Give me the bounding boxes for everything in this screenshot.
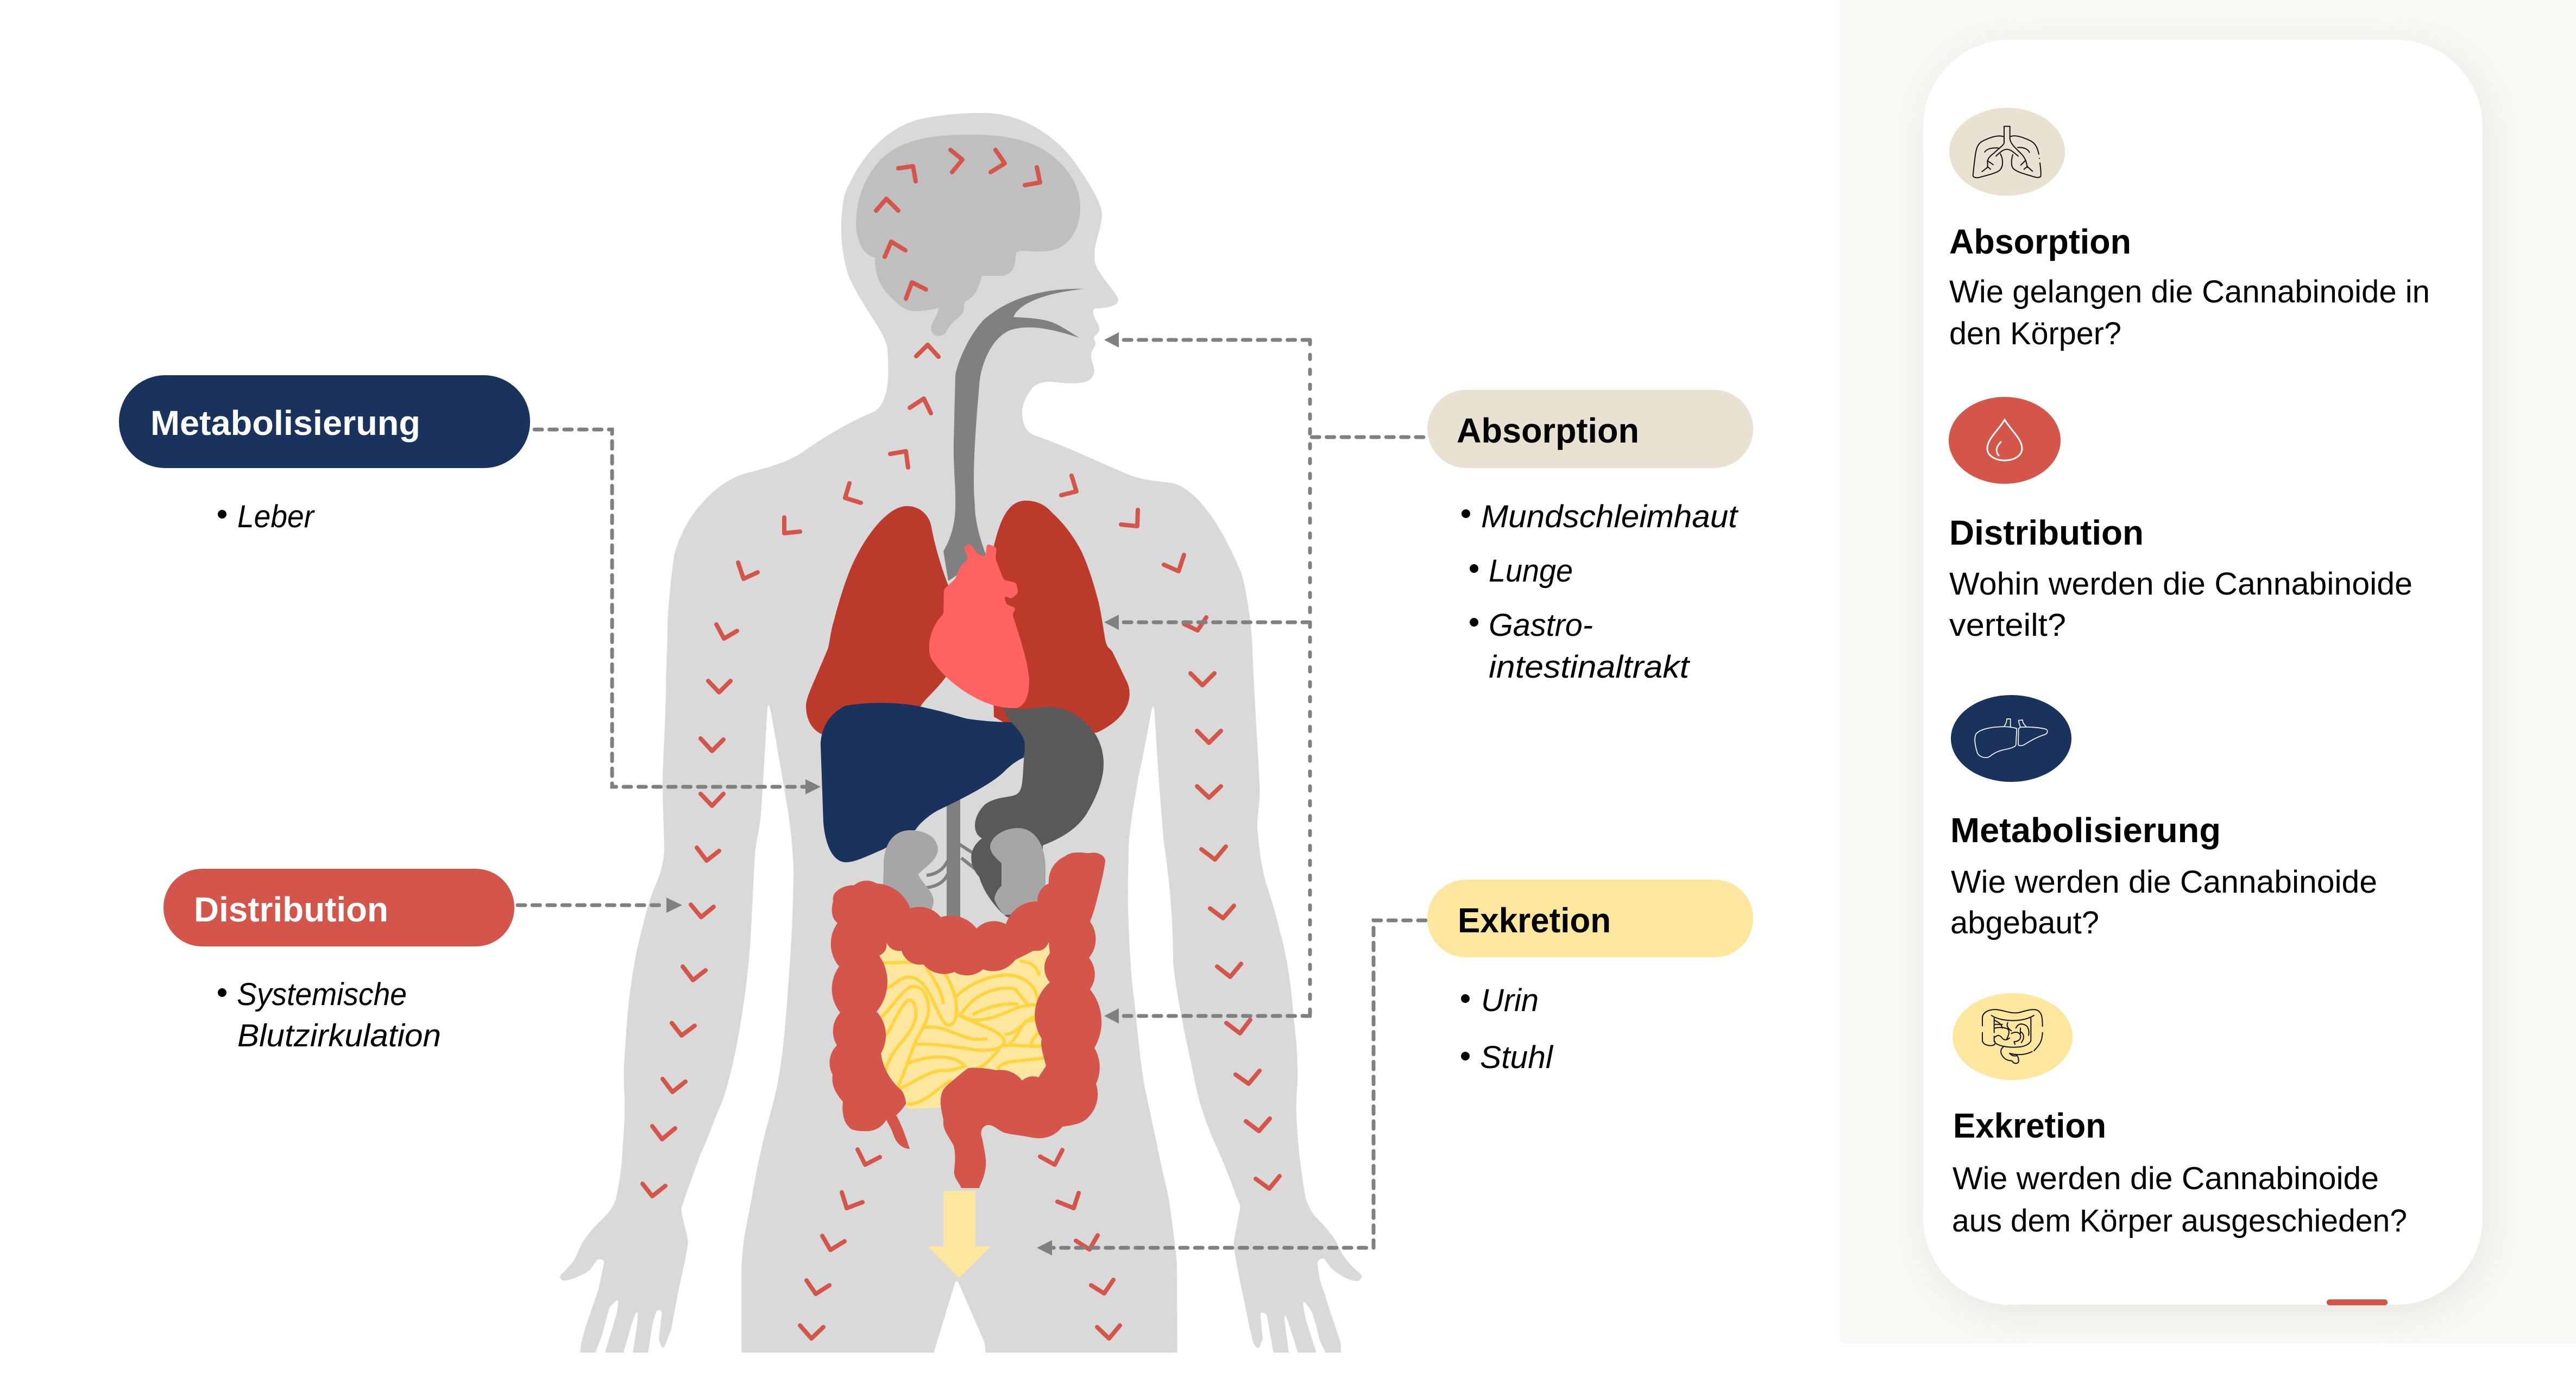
heading: Metabolisierung: Metabolisierung xyxy=(1950,811,2221,850)
list: Distribution: Blutzirkulation xyxy=(237,1018,441,1053)
kidneys xyxy=(882,828,1045,915)
card shadow xyxy=(1928,47,2487,1313)
text: Exkretion question: aus dem Körper ausgeschieden? xyxy=(1952,1203,2407,1239)
heading: Absorption: Absorption xyxy=(1949,222,2131,261)
heading: Exkretion: Exkretion xyxy=(1953,1106,2106,1145)
label: Absorption: Absorption xyxy=(1457,411,1639,450)
list: Distribution: Systemische xyxy=(237,977,407,1012)
icon: lungs xyxy=(1949,108,2065,195)
trachea and esophagus xyxy=(943,289,1084,581)
text: Distribution question xyxy=(1949,566,2413,643)
list: Exkretion xyxy=(1461,983,1554,1075)
label: Metabolisierung xyxy=(119,375,530,468)
text: Absorption question xyxy=(1949,274,2430,351)
liver xyxy=(821,703,1025,862)
arrow: Metabolisierung to liver xyxy=(534,430,821,794)
icon: liver xyxy=(1951,695,2071,782)
list: Exkretion: Stuhl xyxy=(1480,1040,1554,1075)
list: Absorption xyxy=(1462,499,1739,685)
icon: blood drop xyxy=(1949,397,2061,484)
small intestine xyxy=(879,942,1051,1109)
text: Metabolisierung question: Wie werden die Cannabinoide xyxy=(1951,864,2377,900)
label: Distribution xyxy=(163,869,514,946)
body silhouette xyxy=(559,113,1363,1368)
excretion arrow xyxy=(928,1191,991,1278)
heading: Distribution: Distribution xyxy=(1949,513,2144,552)
label: Distribution: Distribution xyxy=(194,890,388,929)
arrow: Distribution to arm xyxy=(518,898,682,913)
list: Absorption: Lunge xyxy=(1489,553,1573,589)
text: Metabolisierung question: abgebaut? xyxy=(1950,905,2099,940)
accent bar xyxy=(2327,1299,2388,1305)
aorta and renal vessels xyxy=(927,798,1002,929)
arrow: Exkretion to gut exit xyxy=(1037,920,1426,1255)
text: Metabolisierung question xyxy=(1950,864,2377,940)
text: Distribution question: Wohin werden die Cannabinoide xyxy=(1949,566,2413,602)
heart xyxy=(929,543,1029,708)
brain xyxy=(856,135,1080,336)
label: Metabolisierung: Metabolisierung xyxy=(150,403,420,443)
colon xyxy=(829,852,1105,1188)
text: Absorption question: den Körper? xyxy=(1949,316,2121,351)
circulation chevrons xyxy=(643,150,1280,1338)
text: Absorption question: Wie gelangen die Cannabinoide in xyxy=(1949,274,2430,310)
panel: question card xyxy=(1923,40,2483,1305)
lungs xyxy=(806,501,1130,738)
label: Absorption xyxy=(1427,390,1753,468)
icon: intestine xyxy=(1953,993,2073,1080)
list: Distribution xyxy=(218,977,441,1053)
label: Exkretion: Exkretion xyxy=(1458,901,1611,940)
text: Exkretion question: Wie werden die Cannabinoide xyxy=(1953,1161,2379,1196)
text: Exkretion question xyxy=(1952,1161,2407,1239)
text: Distribution question: verteilt? xyxy=(1949,608,2066,643)
stomach xyxy=(971,707,1104,923)
list: Absorption: Mundschleimhaut xyxy=(1481,499,1739,534)
list: Exkretion: Urin xyxy=(1481,983,1539,1018)
list: Absorption: intestinaltrakt xyxy=(1489,649,1691,685)
label: Exkretion xyxy=(1427,880,1753,957)
panel: right background xyxy=(1840,0,2576,1343)
list: Metabolisierung: Leber xyxy=(237,499,316,534)
list: Absorption: Gastro- xyxy=(1489,608,1593,643)
arrow: Absorption to mouth, lung and intestine xyxy=(1104,332,1424,1024)
